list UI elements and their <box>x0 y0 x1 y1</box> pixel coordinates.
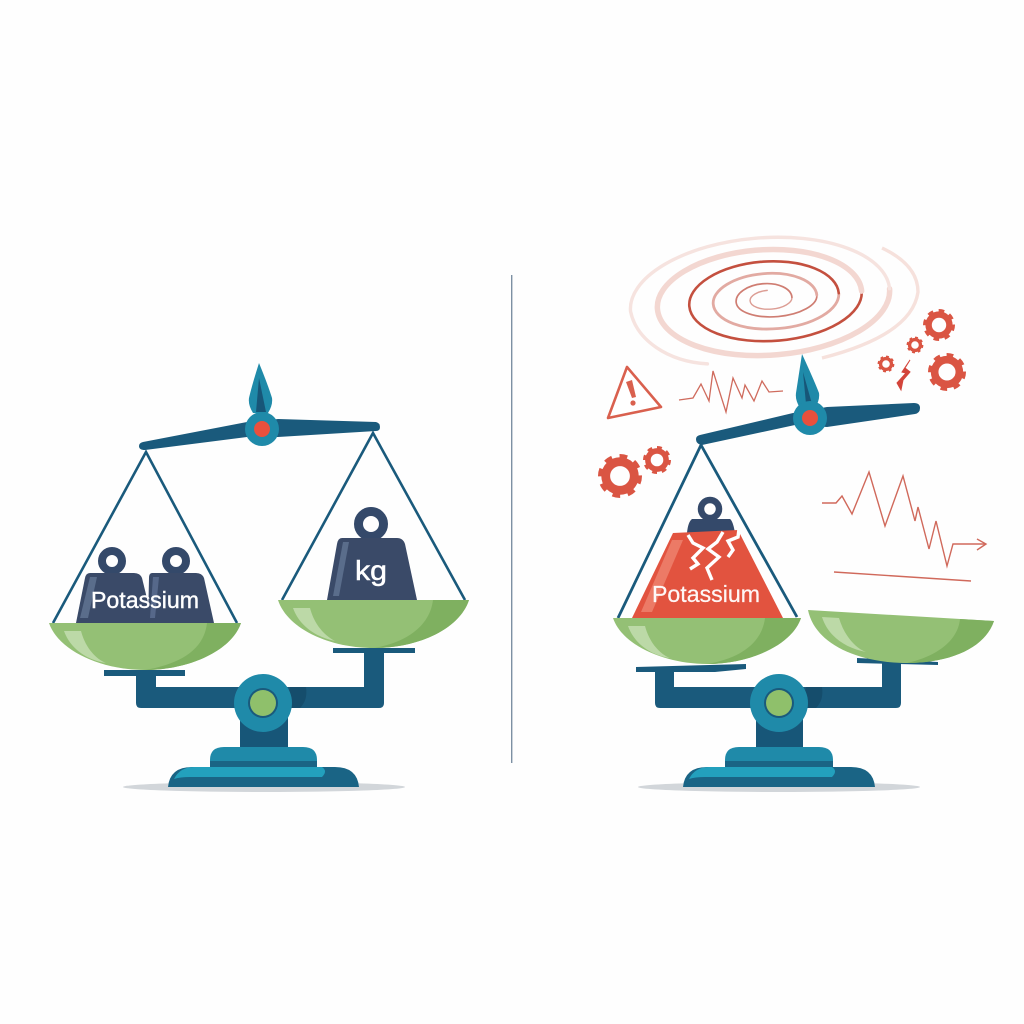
gear small middle <box>908 338 922 352</box>
gears left <box>601 448 669 495</box>
label: Potassium crushed: Potassium <box>652 581 760 607</box>
strings left <box>53 433 465 623</box>
beam right <box>696 403 920 445</box>
right pan raised empty <box>808 610 994 663</box>
spiral outer arm <box>822 248 918 358</box>
pivot left <box>245 412 279 446</box>
gears upper right <box>879 311 964 389</box>
panel: unbalanced scale <box>601 227 994 792</box>
gear small upper left <box>645 448 669 472</box>
scale stand left <box>136 653 384 787</box>
beam left <box>139 419 380 450</box>
pivot right <box>793 401 827 435</box>
pulse line small <box>679 371 783 412</box>
left pan heavy <box>613 618 801 664</box>
pan support plates left <box>104 648 415 676</box>
pointer right <box>796 354 819 408</box>
gear upper <box>925 311 953 339</box>
label: Potassium: Potassium <box>91 587 199 613</box>
panel: balanced scale <box>49 363 469 792</box>
ground shadow left <box>123 782 405 792</box>
right pan <box>278 600 469 648</box>
lightning bolt <box>897 360 910 390</box>
crushed Potassium weight <box>632 500 783 618</box>
scale stand right <box>655 660 901 787</box>
pulse line large with arrow <box>822 472 986 566</box>
warning triangle icon <box>608 367 661 418</box>
weights: Potassium <box>76 551 214 623</box>
cracks <box>688 529 739 580</box>
pointer left <box>249 363 272 413</box>
ground shadow right <box>638 782 920 792</box>
flat trend line <box>834 572 971 581</box>
gear large left <box>601 457 639 495</box>
gear small left <box>879 357 893 371</box>
label: kg: kg <box>355 555 387 586</box>
weight: kg <box>327 512 417 600</box>
strings right <box>618 445 797 618</box>
gear large lower <box>930 355 964 389</box>
dizziness spiral <box>625 227 895 370</box>
left pan <box>49 623 241 670</box>
pan support plates right <box>636 658 938 672</box>
